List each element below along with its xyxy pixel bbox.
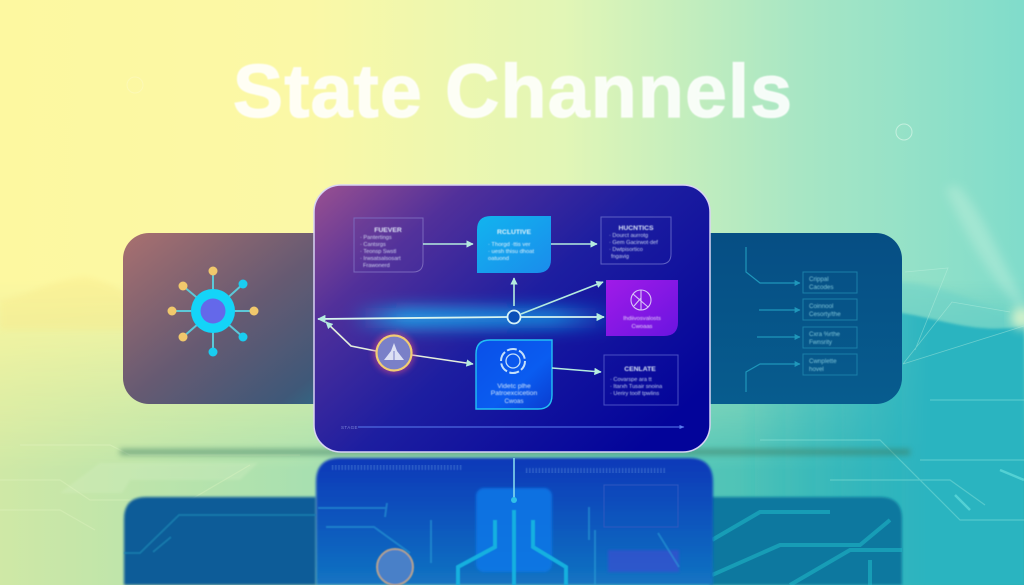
box: Reclutive: RCLUTIVE — [497, 229, 531, 236]
panel: main state channel flow — [314, 185, 710, 452]
output box 2: Coinnool — [809, 303, 833, 310]
main channel line — [318, 310, 604, 324]
icon: gear ring — [501, 349, 525, 373]
glow behind main channel line — [350, 308, 620, 328]
output box 3: Cxra %rthe — [809, 331, 841, 338]
box: Fuever: · Irwsatsalsosart — [360, 256, 401, 262]
arrows between boxes — [326, 244, 603, 372]
warning node icon — [373, 332, 415, 374]
output box 3 — [803, 327, 857, 348]
box: Fuever: · Cantsrgs — [360, 242, 386, 248]
box: Fuever — [354, 218, 423, 272]
output box 2: Cesorty/the — [809, 311, 841, 318]
box: purple channel: Cwoaas — [632, 324, 653, 330]
box: Hucntics: · Dwtpisortico — [609, 247, 643, 253]
reflection: right panel — [710, 497, 902, 585]
box: Hucntics: fngavig — [611, 254, 629, 260]
reflection: main panel — [316, 458, 713, 585]
title: State Channels — [233, 49, 792, 133]
box: Fuever: · Teonsp Swstl — [360, 249, 396, 255]
output box 4: Cwnplette — [809, 358, 837, 365]
channel node — [508, 310, 520, 324]
output box 1: Cacodes — [809, 284, 833, 291]
box: Cenlaite: CENLATE — [624, 366, 656, 373]
output box 1: Crippal — [809, 276, 829, 283]
connector arrows — [746, 247, 800, 392]
shadow under main panel — [120, 449, 910, 455]
box: Cenlaite: · Itarxh Tusair snoina — [610, 384, 663, 390]
box: Cenlaite: · Ueriry toolf tpwlins — [610, 391, 659, 397]
box: Reclutive: · uesh thisu dhoat — [488, 249, 534, 255]
box: Reclutive — [477, 216, 551, 273]
output box 2 — [803, 299, 857, 320]
box: Hucntics — [601, 217, 671, 264]
reflection: left panel — [124, 497, 316, 585]
floor gradient — [0, 280, 1024, 585]
box: Hucntics: HUCNTICS — [618, 225, 654, 232]
box: blue central: Videtc plhe — [497, 383, 531, 390]
output box 1 — [803, 272, 857, 293]
box: Fuever: · Pantertings — [360, 235, 392, 241]
box: blue central: Cwoas — [505, 398, 523, 405]
box: Cenlaite: · Covarspe ara tt — [610, 377, 652, 383]
box: blue central: Patroexcicetion — [491, 390, 537, 397]
box: Cenlaite — [604, 355, 678, 405]
box: Hucntics: · Dourct aurrotg — [609, 233, 648, 239]
output box 3: Fwnsrity — [809, 339, 833, 346]
floor circuit traces — [0, 400, 1024, 530]
box: purple channel: Ihdiivosvalosts — [623, 316, 661, 322]
box: blue central — [476, 340, 552, 409]
box: purple channel — [606, 280, 678, 336]
box: Fuever: FUEVER — [374, 227, 402, 234]
box: Fuever: Frawonerd — [363, 263, 390, 269]
icon: globe — [631, 290, 651, 310]
panel: left node hub — [123, 233, 343, 404]
box: Reclutive: · Thorgd ·ttis ver — [488, 242, 530, 248]
timeline: STAGE — [341, 425, 358, 430]
icon: network hub — [168, 266, 258, 356]
box: Hucntics: · Gem Gacirwot·def — [609, 240, 658, 246]
output box 4: hovel — [809, 366, 824, 373]
box: Reclutive: oatuond — [488, 256, 509, 262]
panel: right outputs — [680, 233, 902, 404]
output box 4 — [803, 354, 857, 375]
